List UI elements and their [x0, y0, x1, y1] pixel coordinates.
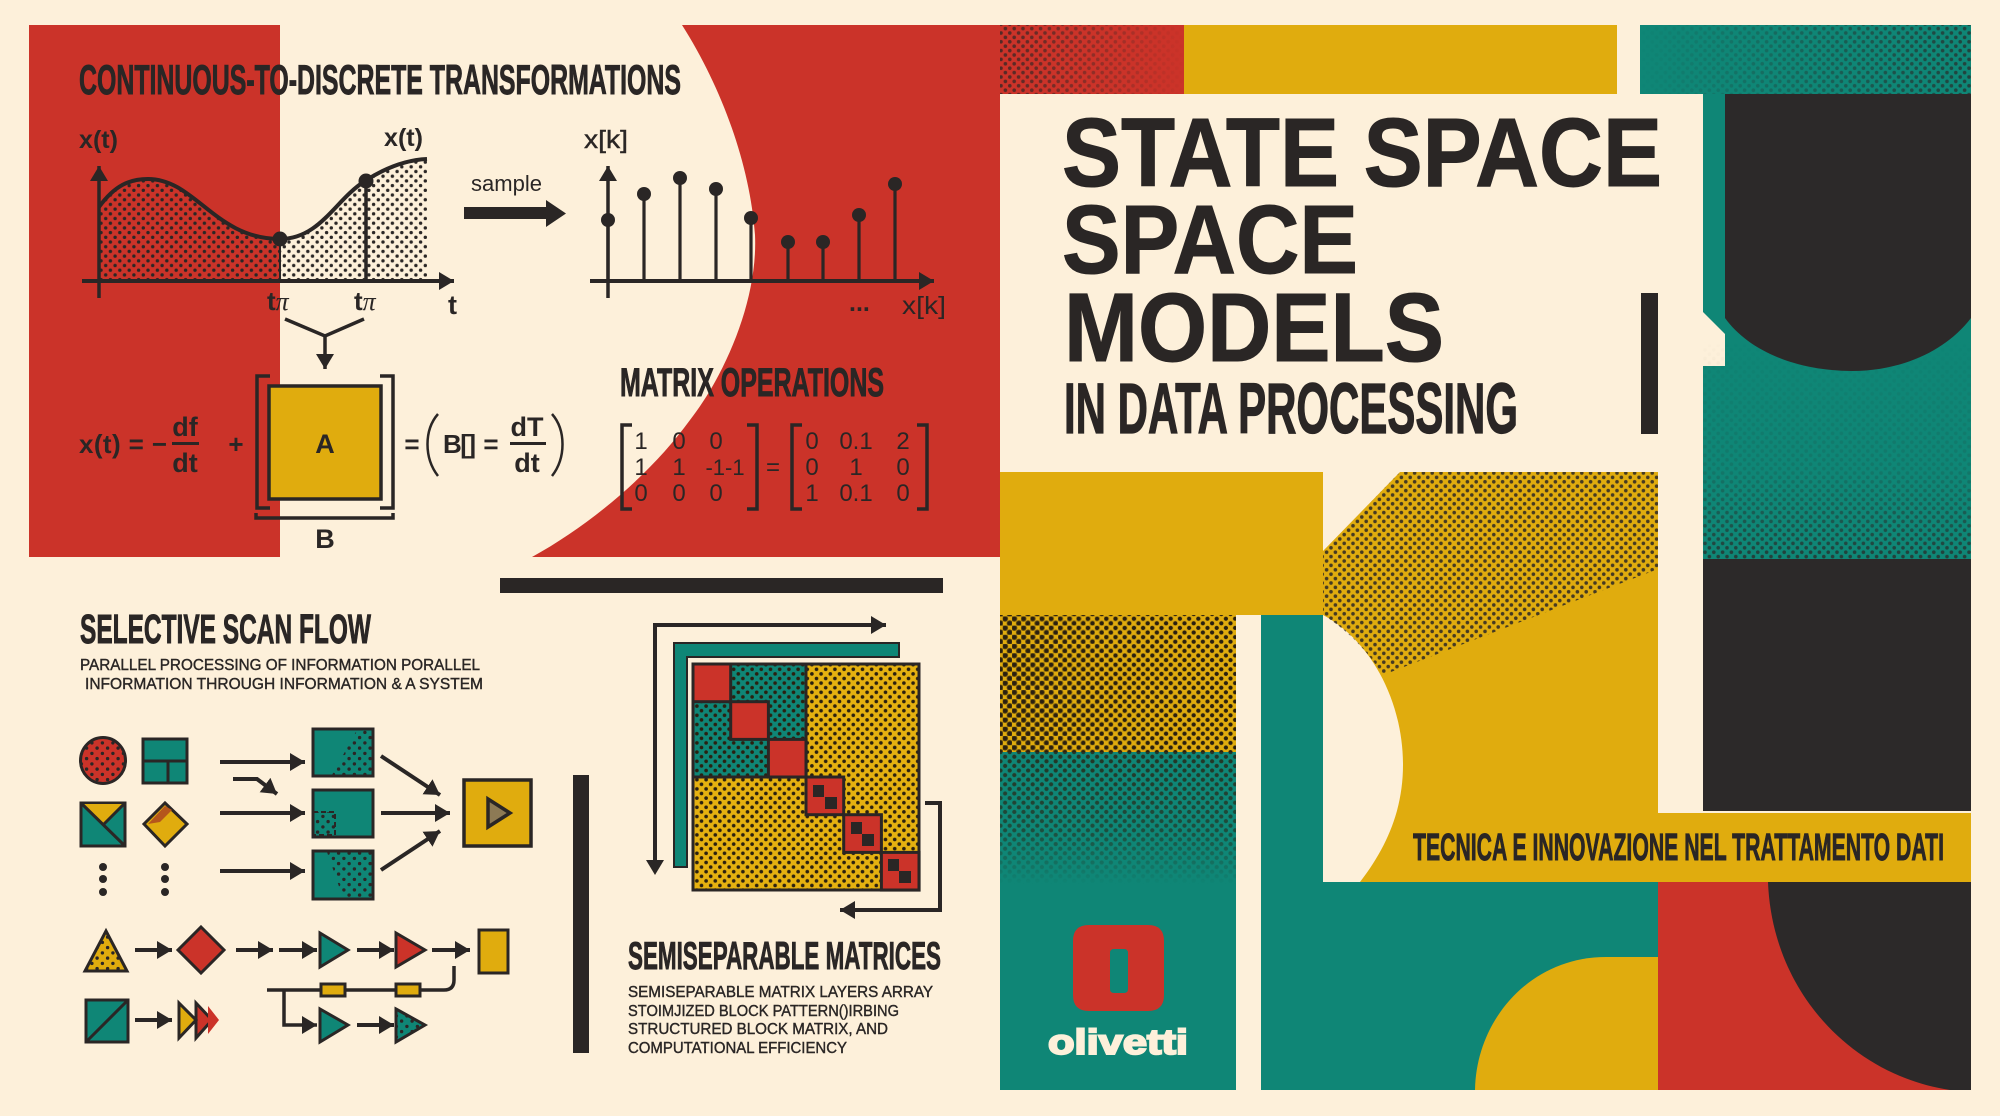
heading: matrix operations: MATRIX OPERATIONS [620, 361, 884, 405]
left matrix values: 0 [709, 428, 723, 455]
right matrix values: 0 [896, 454, 910, 481]
text: semiseparable description [628, 984, 933, 1057]
arrow: bottom-right return [840, 803, 940, 910]
chart: discrete signal x[k] [584, 126, 946, 320]
matrix yellow base [693, 664, 919, 890]
text: selective scan description [80, 657, 483, 693]
title [1062, 98, 1662, 449]
x axis [82, 279, 454, 283]
teal column [1703, 94, 1971, 559]
symbol: teal triangle [320, 933, 348, 967]
label t pi 1: tπ [267, 286, 290, 316]
arrows row two [135, 1020, 394, 1025]
dark rectangle [1703, 559, 1971, 811]
icon group: input shapes [80, 738, 187, 846]
fraction dT/dt [510, 412, 546, 478]
label A: A [315, 429, 335, 459]
left side of equation: x(t) = − [79, 429, 167, 459]
symbol: red triangle [396, 933, 425, 967]
yellow main shape [1323, 472, 1971, 882]
signal curve [99, 159, 427, 239]
arrow: outer down head [646, 860, 664, 875]
left matrix values: -1-1 [705, 455, 745, 480]
dark arch shape [1725, 94, 1971, 371]
panel: top colour band [1000, 25, 1617, 94]
red diagonal cells [693, 664, 919, 890]
symbol: stippled triangle [85, 931, 127, 971]
label t: t [448, 290, 457, 320]
sample points [272, 174, 374, 246]
logo wordmark: olivetti [1048, 1023, 1188, 1062]
left matrix values: 1 [672, 454, 686, 481]
left matrix values: 0 [672, 428, 686, 455]
fraction dT/dt: dT [510, 412, 544, 442]
icon: yellow diamond [144, 803, 187, 846]
brackets around A [257, 376, 393, 508]
equals sign: = [404, 429, 420, 459]
connector nodes [321, 984, 420, 996]
red stipple block [1000, 25, 1184, 94]
arrows: flow into squares [220, 762, 305, 871]
chart: continuous signal x(t) [79, 124, 457, 320]
title line three: MODELS [1064, 273, 1444, 382]
icon: stippled circle [80, 738, 126, 784]
label B: B [315, 524, 335, 554]
right matrix values: 1 [849, 454, 863, 481]
yellow dark stipple block [1000, 615, 1236, 752]
symbol: teal triangle two [320, 1009, 348, 1042]
panel: lower colour composition [1000, 472, 1971, 1090]
divider bar vertical [573, 775, 589, 1053]
heading: semiseparable matrices: SEMISEPARABLE MATRICES [628, 935, 941, 978]
logo mark [1073, 925, 1164, 1011]
dark quarter shape [1768, 882, 1971, 1090]
teal top band [1640, 25, 1971, 94]
symbol: split square [86, 1000, 128, 1042]
red curved block [532, 25, 1000, 557]
left matrix values: 1 [634, 454, 648, 481]
right matrix values: 2 [896, 428, 910, 455]
B[] term: B[] [443, 429, 476, 459]
symbol: stippled teal triangle [396, 1009, 425, 1042]
icon: vertical dots right [161, 863, 169, 896]
label x[k] top: x[k] [584, 126, 628, 154]
title line two: SPACE [1062, 185, 1358, 294]
label t pi 2: tπ [354, 286, 377, 316]
label: sample: sample [471, 171, 542, 196]
text: selective scan description: PARALLEL PROCESSING OF INFORMATION PORALLEL [80, 657, 480, 674]
equation: matrix operation [622, 425, 927, 509]
right matrix values: 1 [805, 480, 819, 507]
yellow arch [1475, 957, 1658, 1090]
label x[k] bottom: x[k] [902, 292, 946, 320]
panel: continuous-to-discrete background [29, 25, 1000, 557]
title subtitle: IN DATA PROCESSING [1064, 370, 1518, 449]
diagram: semiseparable matrix [646, 625, 940, 910]
matrix block A [269, 386, 381, 499]
fraction df/dt: df [172, 412, 199, 442]
under bracket [256, 513, 393, 518]
stippled area under curve [99, 155, 429, 281]
heading: continuous-to-discrete transformations: CONTINUOUS-TO-DISCRETE TRANSFORMATIONS [79, 56, 681, 103]
arrow: outer top-left [655, 625, 886, 862]
equation: state equation with A block [79, 376, 562, 554]
stem heads [601, 171, 902, 249]
right matrix values: 0.1 [839, 428, 873, 455]
heading: selective scan flow: SELECTIVE SCAN FLOW [80, 606, 371, 652]
left matrix values [634, 428, 745, 507]
matrix stipple [693, 664, 919, 890]
fraction df/dt: dt [172, 448, 198, 478]
symbol: red diamond [178, 927, 224, 973]
right matrix values [805, 428, 910, 507]
arrow: sample block arrow [464, 200, 566, 227]
equals: = [766, 454, 780, 481]
left matrix values: 0 [672, 480, 686, 507]
symbol: yellow rectangle [479, 930, 508, 973]
right matrix values: 0.1 [839, 480, 873, 507]
text: semiseparable description: STOIMJIZED BLOCK PATTERN()IRBING [628, 1003, 899, 1020]
stems [608, 178, 895, 281]
icon: envelope [81, 803, 125, 846]
arrows: flow into output [381, 756, 450, 870]
process square 1 [313, 729, 373, 776]
icon: teal grid [143, 739, 187, 783]
title line one: STATE SPACE [1062, 98, 1662, 207]
left matrix values: 1 [634, 428, 648, 455]
text: semiseparable description: COMPUTATIONAL EFFICIENCY [628, 1040, 847, 1057]
icon group: process squares [313, 729, 373, 899]
process square 2 [313, 790, 373, 837]
teal bar and base [1261, 615, 1658, 1090]
red block [1658, 882, 1971, 1090]
left matrix values: 0 [634, 480, 648, 507]
right matrix values: 0 [805, 454, 819, 481]
left matrix values: 0 [709, 480, 723, 507]
right matrix values: 0 [805, 428, 819, 455]
label x(t) right: x(t) [384, 124, 423, 152]
symbol: chevron triangles [179, 1003, 219, 1038]
matrix teal block [693, 664, 806, 777]
teal stipple column with logo field [1000, 752, 1236, 1090]
fraction df/dt [172, 412, 199, 478]
divider bar top [500, 578, 943, 593]
panel: teal and dark column [1640, 25, 1971, 811]
stippled yellow upper shape [1323, 472, 1658, 675]
plus sign: + [228, 429, 244, 459]
arrow: merge connector [285, 319, 364, 369]
icon: vertical dots left [99, 863, 107, 896]
red left block [29, 25, 280, 557]
axes [590, 166, 934, 298]
logo: olivetti [1048, 925, 1188, 1062]
teal layer behind matrix [674, 643, 899, 867]
title accent bar [1641, 293, 1658, 434]
text: semiseparable description: STRUCTURED BLOCK MATRIX, AND [628, 1021, 888, 1038]
sample line [364, 181, 368, 281]
process square 3 [313, 851, 373, 899]
matrix outlines [693, 664, 919, 890]
fraction dT/dt: dt [514, 448, 540, 478]
right matrix values: 0 [896, 480, 910, 507]
connector line with branch [267, 966, 454, 1025]
text: selective scan description: INFORMATION THROUGH INFORMATION & A SYSTEM [85, 676, 483, 693]
large right paren [552, 414, 562, 476]
diagram: lower symbol flow [85, 927, 508, 1042]
icon: output play block [464, 780, 531, 846]
equals sign 2: = [483, 429, 499, 459]
arrows row one [135, 948, 470, 952]
text: semiseparable description: SEMISEPARABLE MATRIX LAYERS ARRAY [628, 984, 933, 1001]
large left paren [428, 414, 438, 476]
label x(t) left: x(t) [79, 126, 118, 154]
matrix brackets [622, 425, 927, 509]
dark sub-cells [813, 785, 911, 883]
y axis [97, 166, 101, 298]
label ellipsis: ... [849, 289, 870, 317]
yellow block [1184, 25, 1617, 94]
yellow left block [1000, 472, 1323, 615]
